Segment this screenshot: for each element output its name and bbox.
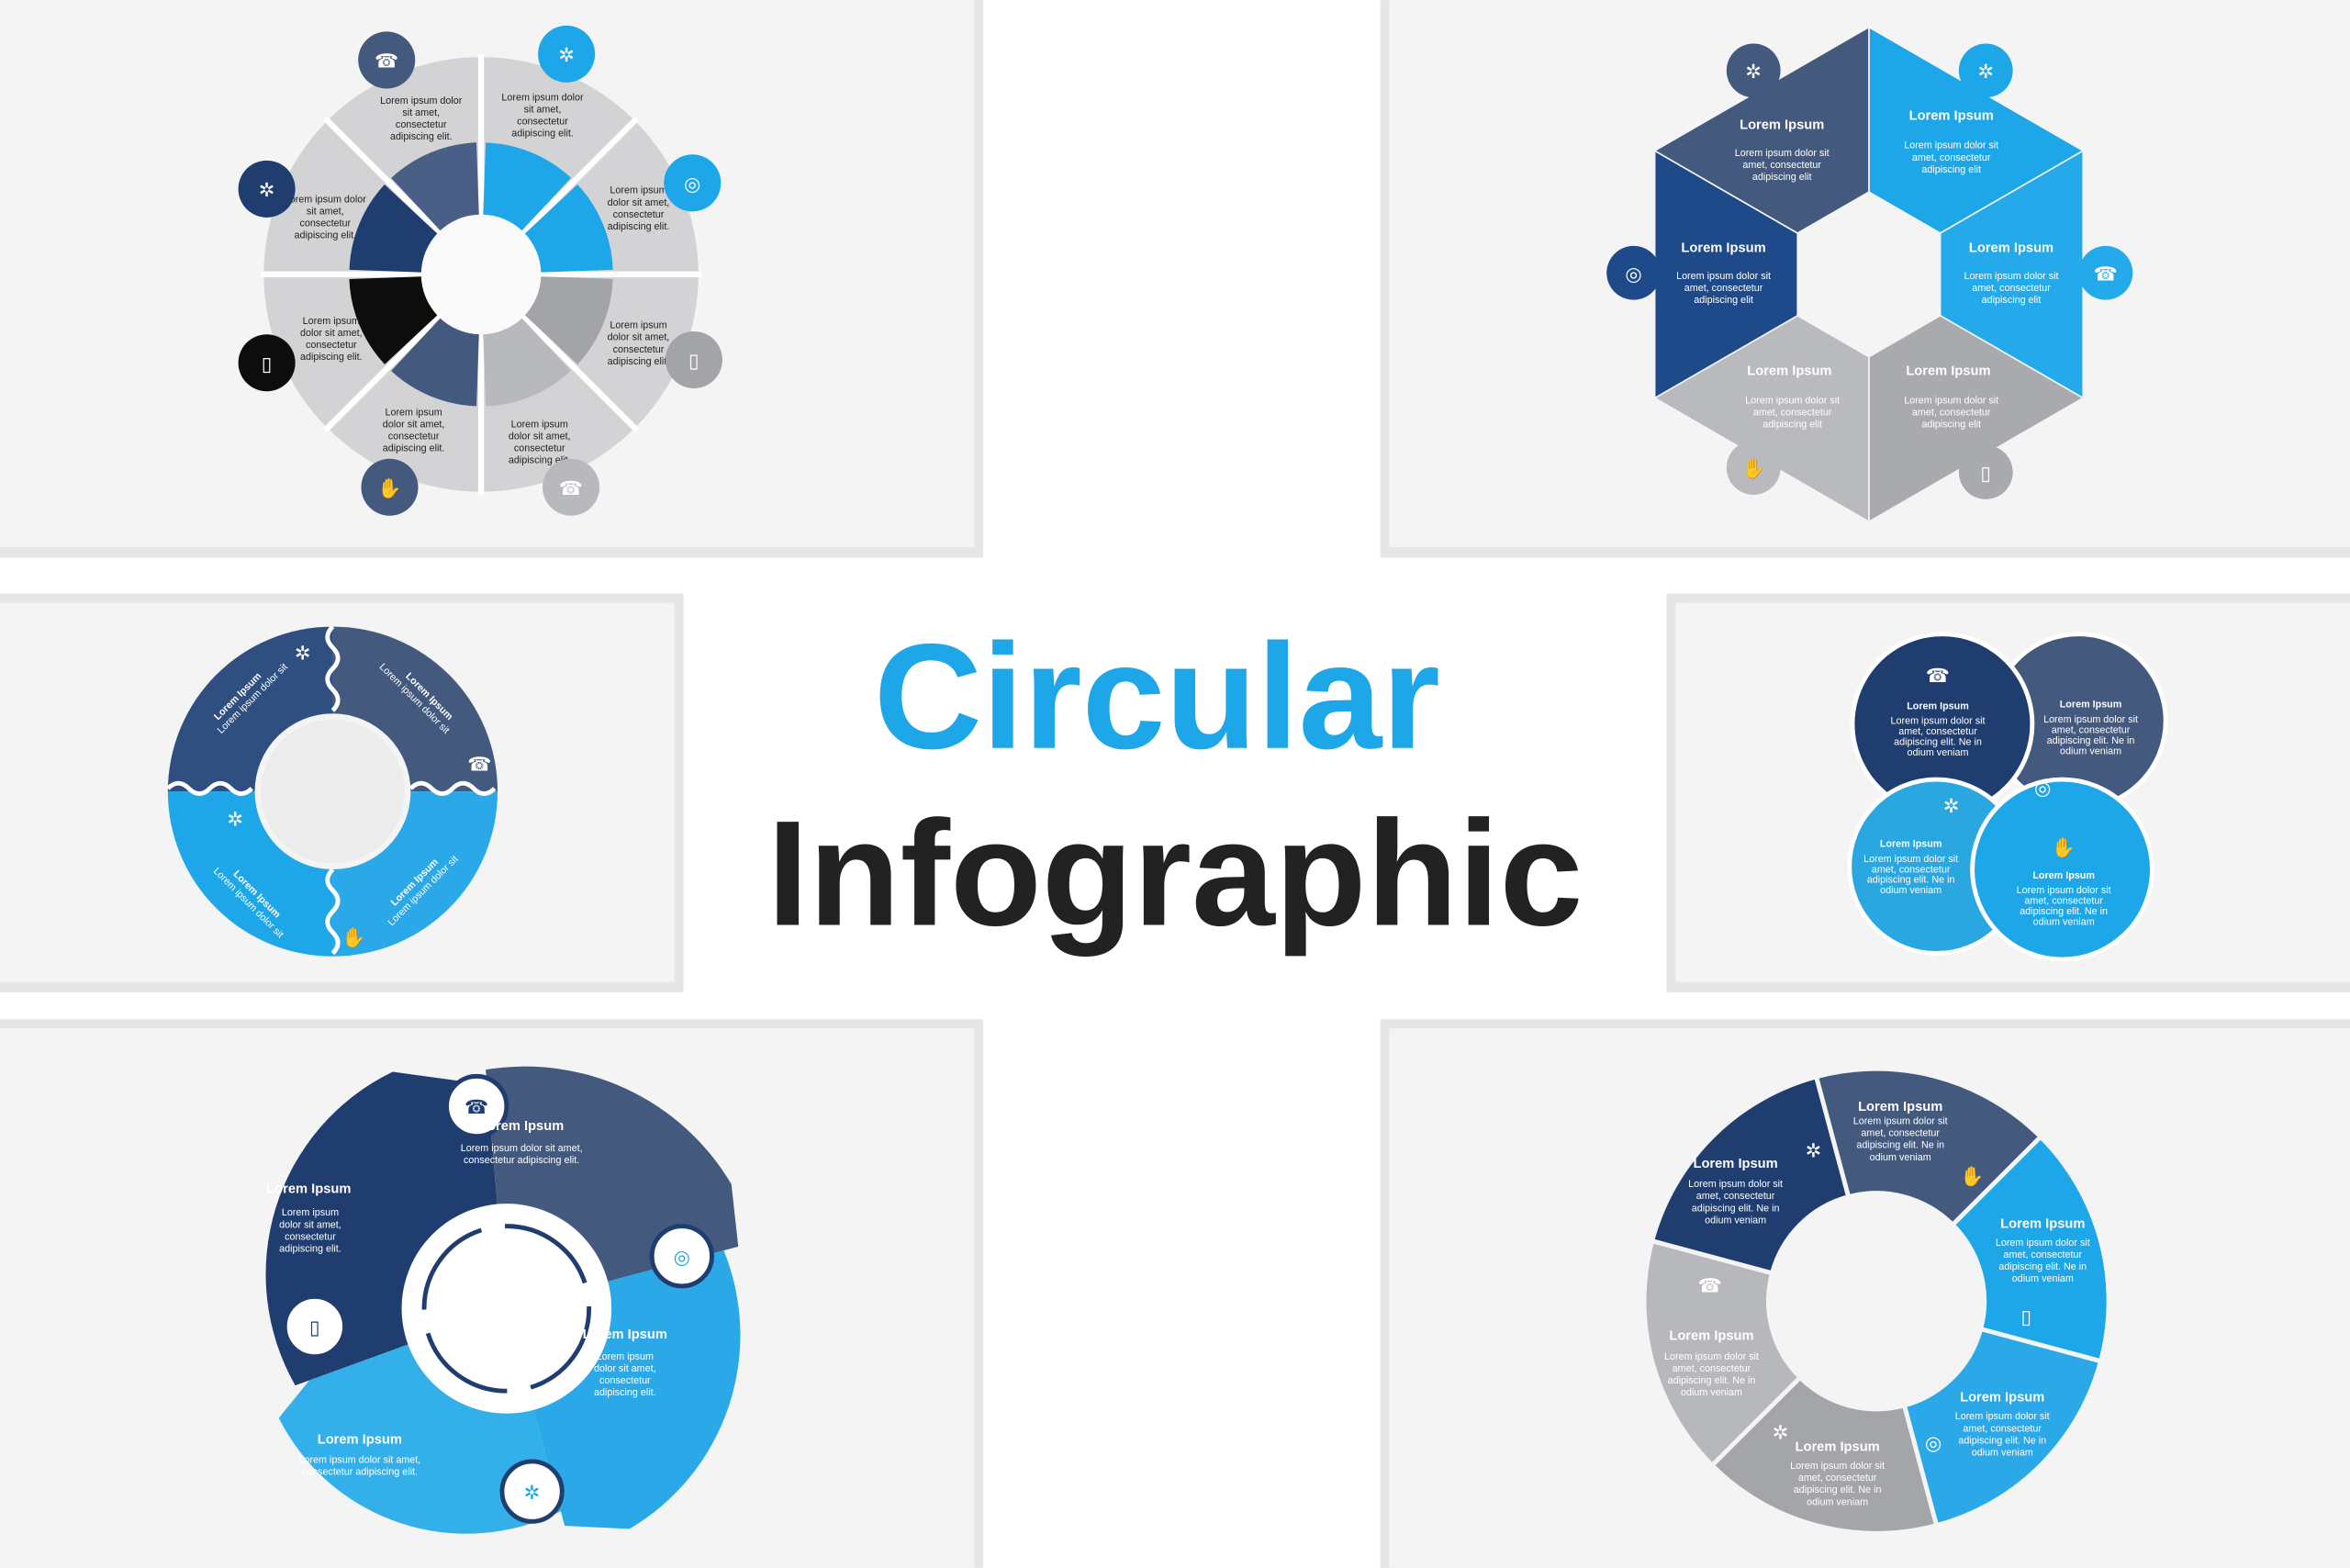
panel: four circles: Lorem Ipsum <box>2032 870 2095 881</box>
panel: wavy ring: Lorem Ipsum <box>389 857 441 908</box>
panel: octagon petal wheel: sit amet, <box>524 105 561 116</box>
panel: octagon petal wheel: consectetur <box>396 119 447 130</box>
panel: spiral cycle: Lorem ipsum dolor sit amet, <box>461 1143 583 1154</box>
panel: octagon petal wheel: Lorem ipsum dolor <box>285 195 366 206</box>
panel: four circles: adipiscing elit. Ne in <box>1867 875 1955 886</box>
panel: four circles: odium veniam <box>2060 745 2121 756</box>
panel: octagon petal wheel: adipiscing elit. <box>608 221 669 232</box>
panel: hexagon: ✋ <box>1741 457 1765 480</box>
panel: hexagon: Lorem ipsum dolor sit <box>1745 395 1840 406</box>
panel: octagon petal wheel: adipiscing elit. <box>390 131 453 142</box>
panel: spiral cycle: Lorem Ipsum <box>318 1432 402 1447</box>
panel: hexagon: adipiscing elit <box>1921 164 1981 175</box>
panel: hexagon: Lorem Ipsum <box>1681 241 1766 255</box>
panel: octagon petal wheel: dolor sit amet, <box>300 328 363 339</box>
panel: octagon petal wheel: dolor sit amet, <box>383 419 444 430</box>
panel: hexagon: amet, consectetur <box>1912 152 1991 163</box>
panel: octagon petal wheel: consectetur <box>299 218 352 230</box>
panel: spiral cycle: Lorem ipsum <box>282 1207 339 1218</box>
panel: wavy ring: Lorem Ipsum <box>403 671 455 722</box>
panel: hexagon: Lorem ipsum dolor sit <box>1676 271 1771 282</box>
title: Circular <box>874 612 1440 780</box>
panel: spiral cycle: consectetur <box>285 1231 336 1242</box>
panel: segmented ring: Lorem Ipsum <box>1796 1440 1880 1455</box>
panel: four circles: Lorem Ipsum <box>1907 700 1969 711</box>
panel: spiral cycle: ▯ <box>309 1317 320 1338</box>
panel: octagon petal wheel: Lorem ipsum <box>610 320 667 331</box>
panel: hexagon: ☎ <box>2094 263 2118 285</box>
panel: hexagon: adipiscing elit <box>1752 172 1812 183</box>
panel: octagon petal wheel: adipiscing elit. <box>509 455 571 466</box>
panel: wavy ring: Lorem Ipsum <box>231 868 283 920</box>
panel: segmented ring: Lorem ipsum dolor sit <box>1996 1238 2090 1249</box>
panel: segmented ring: ◎ <box>1925 1433 1942 1454</box>
panel: segmented ring: Lorem ipsum dolor sit <box>1853 1116 1948 1127</box>
panel: segmented ring: odium veniam <box>1681 1387 1742 1398</box>
panel: hexagon: Lorem ipsum dolor sit <box>1735 148 1830 159</box>
panel: segmented ring: adipiscing elit. Ne in <box>1856 1140 1944 1151</box>
panel: spiral cycle: ☎ <box>464 1097 488 1118</box>
panel: spiral cycle: consectetur <box>599 1375 651 1386</box>
panel: four circles: adipiscing elit. Ne in <box>2020 906 2108 917</box>
panel: octagon petal wheel: Lorem ipsum <box>385 407 442 418</box>
panel: wavy ring: Lorem ipsum dolor sit <box>386 854 461 928</box>
panel: four circles: Lorem ipsum dolor sit <box>2017 885 2111 896</box>
panel: octagon petal wheel <box>239 26 722 516</box>
panel: segmented ring: odium veniam <box>1807 1496 1868 1507</box>
panel: four circles: Lorem ipsum dolor sit <box>1891 716 1985 727</box>
panel: four circles: amet, consectetur <box>1872 864 1951 875</box>
panel: hexagon: amet, consectetur <box>1912 407 1991 418</box>
panel: hexagon: ▯ <box>1980 464 1991 485</box>
panel: octagon petal wheel: Lorem ipsum <box>610 185 667 196</box>
panel: segmented ring: ✋ <box>1960 1164 1985 1187</box>
panel: hexagon: adipiscing elit <box>1762 419 1822 430</box>
panel: octagon petal wheel: ☎ <box>375 51 398 73</box>
panel: segmented ring: Lorem Ipsum <box>1960 1391 2044 1406</box>
panel: spiral cycle: Lorem Ipsum <box>266 1182 351 1197</box>
panel: four circles: odium veniam <box>1880 885 1942 896</box>
panel: four circles: odium veniam <box>2033 916 2095 927</box>
panel: segmented ring <box>1644 1069 2109 1533</box>
panel: segmented ring: Lorem ipsum dolor sit <box>1790 1461 1885 1472</box>
panel: octagon petal wheel: adipiscing elit. <box>383 443 444 454</box>
panel: octagon petal wheel: adipiscing elit. <box>300 352 363 363</box>
panel: four circles: adipiscing elit. Ne in <box>1894 737 1982 748</box>
panel: spiral cycle: Lorem ipsum <box>597 1351 654 1362</box>
panel: four circles: Lorem ipsum dolor sit <box>2043 714 2138 725</box>
panel: four circles: amet, consectetur <box>1898 726 1977 737</box>
panel: octagon petal wheel: consectetur <box>517 117 568 128</box>
panel: segmented ring: ✲ <box>1773 1422 1788 1443</box>
panel: four circles <box>1850 634 2165 959</box>
panel: octagon petal wheel: consectetur <box>514 443 565 454</box>
panel: hexagon: adipiscing elit <box>1921 419 1981 430</box>
panel: hexagon <box>1606 28 2132 521</box>
panel: segmented ring: adipiscing elit. Ne in <box>1958 1435 2046 1446</box>
panel: segmented ring: amet, consectetur <box>2004 1249 2082 1260</box>
panel: octagon petal wheel: ◎ <box>684 174 701 195</box>
panel: hexagon: Lorem Ipsum <box>1740 118 1824 133</box>
panel: octagon petal wheel: ✲ <box>558 45 575 66</box>
title <box>767 612 1583 957</box>
panel: wavy ring: Lorem ipsum dolor sit <box>377 661 452 736</box>
panel: segmented ring: adipiscing elit. Ne in <box>1692 1203 1779 1214</box>
panel: octagon petal wheel: Lorem ipsum <box>511 419 568 430</box>
panel: four circles: amet, consectetur <box>2024 896 2103 907</box>
panel: octagon petal wheel: adipiscing elit. <box>511 129 574 140</box>
panel: wavy ring: Lorem ipsum dolor sit <box>216 661 290 736</box>
panel: segmented ring: adipiscing elit. Ne in <box>1794 1484 1882 1495</box>
panel: hexagon: Lorem Ipsum <box>1747 364 1832 378</box>
panel: octagon petal wheel: dolor sit amet, <box>509 431 571 442</box>
panel: spiral cycle: dolor sit amet, <box>279 1219 341 1230</box>
panel: wavy ring: ☎ <box>467 754 492 775</box>
panel: spiral cycle: Lorem Ipsum <box>479 1119 564 1134</box>
panel: segmented ring: ✲ <box>1806 1141 1821 1162</box>
panel: octagon petal wheel: consectetur <box>613 209 665 220</box>
panel: four circles: amet, consectetur <box>2052 724 2131 735</box>
panel: octagon petal wheel: ▯ <box>688 351 699 372</box>
panel: spiral cycle: consectetur adipiscing elit. <box>302 1467 418 1478</box>
panel: wavy ring: ✲ <box>295 643 311 664</box>
panel: four circles: ☎ <box>1926 666 1950 687</box>
panel: hexagon: amet, consectetur <box>1684 283 1763 294</box>
panel: segmented ring: amet, consectetur <box>1963 1423 2042 1434</box>
panel: hexagon: amet, consectetur <box>1972 283 2051 294</box>
panel: hexagon: amet, consectetur <box>1753 407 1832 418</box>
panel: segmented ring: odium veniam <box>1972 1447 2033 1458</box>
panel: octagon petal wheel: ▯ <box>262 353 272 375</box>
panel: octagon petal wheel: adipiscing elit. <box>294 230 356 241</box>
panel: segmented ring: Lorem Ipsum <box>2000 1216 2085 1231</box>
panel: octagon petal wheel: consectetur <box>613 344 665 355</box>
panel: hexagon: adipiscing elit <box>1694 295 1753 306</box>
panel: four circles: adipiscing elit. Ne in <box>2047 735 2134 746</box>
title: Infographic <box>767 789 1583 957</box>
panel: octagon petal wheel: ✋ <box>377 476 402 499</box>
panel: octagon petal wheel: dolor sit amet, <box>608 332 669 343</box>
panel: segmented ring: amet, consectetur <box>1696 1191 1775 1202</box>
panel: four circles: Lorem Ipsum <box>2060 700 2121 711</box>
panel: octagon petal wheel: sit amet, <box>402 107 440 118</box>
panel: segmented ring: Lorem Ipsum <box>1693 1157 1778 1171</box>
panel: spiral cycle: Lorem ipsum dolor sit amet, <box>298 1455 420 1466</box>
panel: segmented ring: amet, consectetur <box>1798 1473 1877 1484</box>
panel: spiral cycle: adipiscing elit. <box>594 1387 656 1398</box>
panel: four circles: ✋ <box>2052 836 2076 859</box>
panel: four circles: ◎ <box>2034 778 2052 799</box>
panel: hexagon: ✲ <box>1745 62 1762 83</box>
panel: four circles: Lorem ipsum dolor sit <box>1863 854 1958 865</box>
panel: segmented ring: Lorem Ipsum <box>1858 1100 1942 1114</box>
panel: spiral cycle: consectetur adipiscing elit. <box>464 1155 579 1166</box>
panel: segmented ring: amet, consectetur <box>1861 1128 1940 1139</box>
panel: segmented ring: Lorem ipsum dolor sit <box>1664 1351 1759 1362</box>
panel: hexagon: Lorem Ipsum <box>1909 109 1994 124</box>
panel: octagon petal wheel: ☎ <box>559 478 583 499</box>
panel: hexagon: ◎ <box>1625 263 1642 285</box>
panel: segmented ring: odium veniam <box>2012 1273 2074 1284</box>
panel: segmented ring: odium veniam <box>1705 1215 1766 1226</box>
panel: spiral cycle: Lorem Ipsum <box>583 1327 667 1342</box>
panel: octagon petal wheel: adipiscing elit. <box>608 356 669 367</box>
panel: wavy ring: Lorem Ipsum <box>212 671 263 722</box>
panel: segmented ring: Lorem ipsum dolor sit <box>1688 1179 1783 1190</box>
panel: hexagon: adipiscing elit <box>1982 295 2041 306</box>
panel: hexagon: ✲ <box>1977 62 1994 83</box>
panel: four circles: odium veniam <box>1908 747 1969 758</box>
panel: segmented ring: adipiscing elit. Ne in <box>1668 1375 1755 1386</box>
panel: octagon petal wheel: dolor sit amet, <box>608 197 669 208</box>
panel: spiral cycle: ✲ <box>524 1483 540 1504</box>
panel: octagon petal wheel: Lorem ipsum dolor <box>380 95 462 106</box>
panel: octagon petal wheel: ✲ <box>259 180 275 201</box>
panel: hexagon: Lorem ipsum dolor sit <box>1904 395 1998 406</box>
panel: wavy ring: ✋ <box>341 926 366 949</box>
panel: spiral cycle: adipiscing elit. <box>279 1243 341 1254</box>
panel: segmented ring: odium veniam <box>1870 1152 1931 1163</box>
panel: four circles: ✲ <box>1943 796 1960 817</box>
panel: segmented ring: Lorem Ipsum <box>1669 1329 1754 1344</box>
panel: wavy ring <box>168 627 498 957</box>
panel: hexagon: Lorem Ipsum <box>1906 364 1991 378</box>
panel: octagon petal wheel: consectetur <box>306 340 357 351</box>
panel: spiral cycle <box>266 1067 740 1534</box>
panel: wavy ring: ✲ <box>227 810 243 831</box>
panel: segmented ring: adipiscing elit. Ne in <box>1998 1261 2087 1272</box>
panel: spiral cycle: dolor sit amet, <box>594 1363 656 1374</box>
panel: octagon petal wheel: Lorem ipsum <box>303 316 360 327</box>
panel: hexagon: amet, consectetur <box>1742 160 1821 171</box>
panel: octagon petal wheel: consectetur <box>388 431 440 442</box>
panel: four circles: Lorem Ipsum <box>1880 839 1942 850</box>
panel: hexagon: Lorem ipsum dolor sit <box>1964 271 2058 282</box>
panel: segmented ring: amet, consectetur <box>1673 1363 1751 1374</box>
panel: wavy ring: Lorem ipsum dolor sit <box>211 866 285 940</box>
panel: octagon petal wheel: sit amet, <box>307 207 344 218</box>
panel: hexagon: Lorem ipsum dolor sit <box>1904 140 1998 151</box>
panel: segmented ring: ☎ <box>1698 1275 1722 1296</box>
panel: hexagon: Lorem Ipsum <box>1969 241 2053 255</box>
panel: segmented ring: Lorem ipsum dolor sit <box>1955 1411 2050 1422</box>
panel: segmented ring: ▯ <box>2021 1307 2031 1328</box>
panel: octagon petal wheel: Lorem ipsum dolor <box>501 93 584 104</box>
panel: spiral cycle: ◎ <box>674 1247 690 1268</box>
